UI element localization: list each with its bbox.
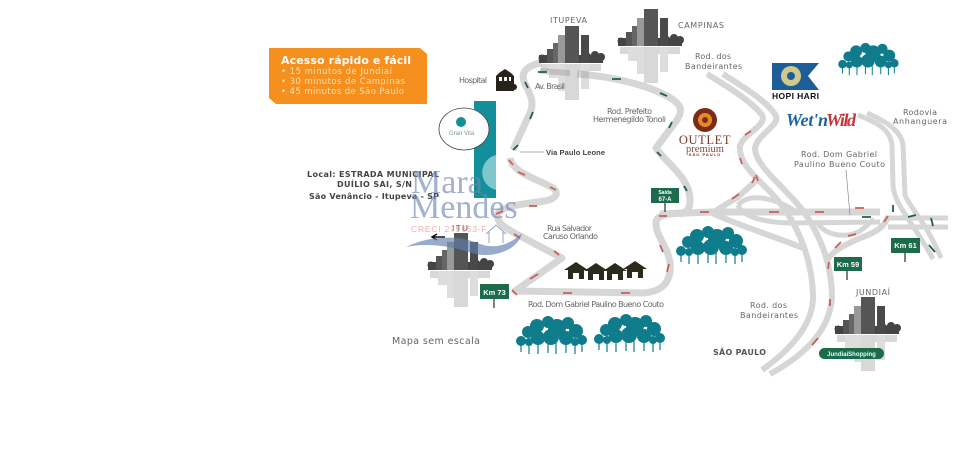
sign: Km 61: Km 61 — [894, 241, 917, 250]
road labels: Paulino Bueno Couto — [794, 160, 885, 169]
road labels: Hermenegildo Tonoli — [593, 115, 666, 124]
label: Sao Paulo: SÃO PAULO — [713, 347, 766, 357]
logo: Hopi Hari: HOPI HARI — [772, 91, 819, 101]
logo: Outlet Premium: SÃO PAULO — [689, 152, 721, 157]
city: Itu — [428, 224, 494, 307]
logo: Gran Vita — [439, 101, 496, 198]
badge: Jundiai Shopping: JundiaíShopping — [827, 352, 876, 358]
logo: Wet'n Wild — [786, 110, 857, 130]
tree clusters — [516, 43, 899, 354]
icon: hospital — [459, 69, 517, 91]
road: Rua Salvador and Rod. Dom Gabriel — [497, 158, 680, 293]
road labels: Rua Salvador — [547, 224, 593, 233]
logo: Hopi Hari — [772, 63, 819, 101]
road labels: Rod. Dom Gabriel Paulino Bueno Couto — [528, 300, 664, 309]
icon: hospital: Hospital — [459, 76, 487, 85]
watermark: CRECI 279653-F — [411, 224, 487, 234]
label: Via Paulo Leone: Via Paulo Leone — [546, 148, 605, 157]
address block: São Venâncio - Itupeva - SP — [309, 192, 439, 201]
road labels: Rod. Dom Gabriel — [801, 150, 877, 159]
logo: Outlet Premium — [679, 108, 731, 157]
sign: Km 59 — [834, 257, 862, 280]
road: Rod. Dom Gabriel east — [660, 212, 880, 214]
watermark: Mara — [411, 164, 483, 201]
city: Campinas — [618, 9, 724, 83]
sign: Saida 67-A: 67-A — [658, 197, 672, 203]
city: Itu: ITU — [452, 224, 468, 233]
sign: Saida 67-A: Saída — [658, 190, 672, 196]
road labels: Bandeirantes — [685, 62, 742, 71]
sign: Km 73: Km 73 — [483, 288, 506, 297]
city: Jundiai — [834, 286, 901, 371]
sign: Km 73 — [480, 284, 509, 308]
direction arrows — [496, 72, 935, 345]
road labels: Caruso Orlando — [543, 232, 598, 241]
road labels: Anhanguera — [893, 117, 947, 126]
village houses — [564, 261, 647, 280]
callout list: • 45 minutos de São Paulo — [281, 87, 404, 97]
city: Campinas: CAMPINAS — [678, 21, 724, 30]
road labels: Rod. dos — [695, 52, 731, 61]
sign: Km 59: Km 59 — [837, 260, 859, 269]
access callout panel — [269, 48, 427, 104]
callout list: • 15 minutos de Jundiaí — [281, 67, 393, 77]
callout list: • 30 minutos de Campinas — [281, 77, 406, 87]
logo: Outlet Premium: OUTLET — [679, 133, 731, 147]
road labels: Rod. dos — [750, 301, 787, 310]
address block — [307, 170, 439, 201]
road labels: Rod. Prefeito — [607, 107, 652, 116]
city: Itupeva: ITUPEVA — [550, 16, 588, 25]
logo: Gran Vita: Gran Vita — [449, 131, 475, 137]
logo: Wet'n Wild: Wet'n — [786, 110, 828, 130]
watermark: Mendes — [410, 189, 518, 226]
watermark — [406, 164, 522, 255]
road: Rod. dos Bandeirantes — [707, 74, 813, 370]
road labels — [528, 52, 947, 320]
label: Via Paulo Leone — [520, 148, 605, 157]
road labels: Rodovia — [903, 108, 937, 117]
sign: Km 61 — [891, 238, 920, 262]
road labels: Bandeirantes — [740, 311, 798, 320]
road: Av. Brasil connector — [540, 71, 570, 73]
road: Rodovia Anhanguera — [858, 115, 933, 259]
logo: Wet'n Wild: Wild — [826, 110, 857, 130]
address block: DUÍLIO SAI, S/N — [337, 178, 412, 189]
road: Campinas highway — [577, 74, 690, 214]
callout list — [281, 67, 406, 97]
address block: Local: ESTRADA MUNICIPAL — [307, 170, 439, 179]
city: Itupeva — [538, 16, 605, 100]
logo: Outlet Premium: premium — [686, 144, 724, 155]
sign: Saida 67-A — [651, 188, 679, 212]
label: Mapa sem escala: Mapa sem escala — [392, 336, 480, 347]
road: Itupeva to Via Paulo Leone — [513, 63, 541, 150]
callout heading: Acesso rápido e fácil — [281, 54, 411, 67]
road network — [497, 63, 948, 374]
badge: Jundiai Shopping — [819, 348, 884, 359]
road labels: Av. Brasil — [535, 82, 565, 91]
city: Jundiai: JUNDIAÍ — [855, 286, 891, 297]
